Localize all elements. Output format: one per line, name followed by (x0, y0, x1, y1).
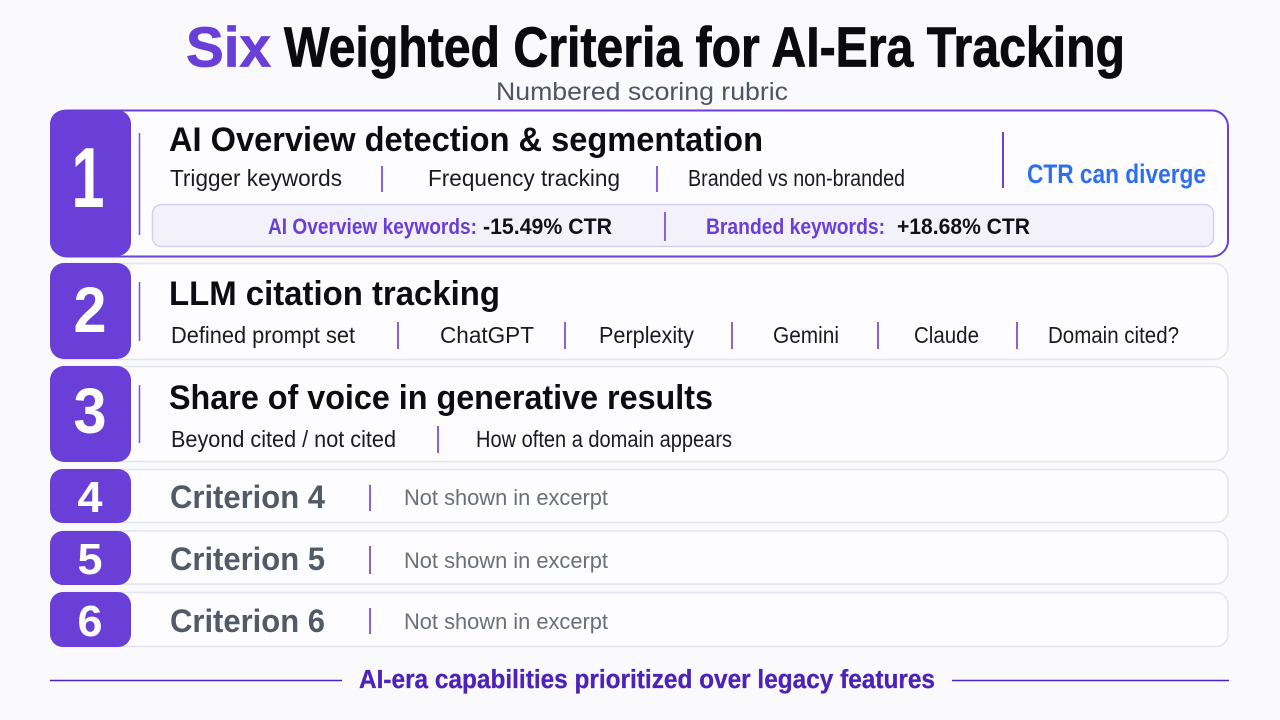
title: Weighted Criteria for AI-Era Tracking (284, 16, 1125, 80)
stat strip: +18.68% CTR (897, 214, 1030, 239)
panel: criterion 5 (50, 531, 1228, 585)
note 4: Not shown in excerpt (404, 485, 608, 510)
label 4: Criterion 4 (170, 479, 325, 515)
badge 3: 3 (74, 375, 106, 447)
sub-items 1 (170, 165, 905, 192)
note 5: Not shown in excerpt (404, 548, 608, 573)
badge 1: 1 (72, 131, 104, 226)
sub-items 2: Perplexity (599, 322, 694, 348)
badge 2 (50, 263, 131, 359)
divider accent (138, 133, 140, 235)
label 5: Criterion 5 (170, 541, 325, 577)
badge 6 (50, 592, 131, 647)
panel: criterion 1 (50, 110, 1228, 256)
sub-items 2: Domain cited? (1048, 322, 1179, 348)
sub-items 1: Frequency tracking (428, 165, 620, 191)
badge 4 (50, 469, 131, 523)
heading 3: Share of voice in generative results (169, 379, 713, 417)
stat strip: Branded keywords: (706, 214, 885, 239)
heading 1: AI Overview detection & segmentation (169, 121, 763, 159)
sub-items 1: Trigger keywords (170, 165, 342, 191)
footer takeaway: AI-era capabilities prioritized over legacy features (359, 666, 935, 694)
sub-items 1: Branded vs non-branded (688, 165, 905, 191)
sub-items 2: Gemini (773, 322, 839, 348)
badge 5 (50, 531, 131, 585)
badge 2: 2 (74, 274, 106, 346)
heading 2: LLM citation tracking (169, 275, 500, 313)
badge 3 (50, 366, 131, 462)
stat strip: AI Overview keywords: (268, 214, 477, 239)
label 6: Criterion 6 (170, 603, 325, 639)
sub-items 3: Beyond cited / not cited (171, 426, 396, 452)
sub-items 2: ChatGPT (440, 322, 534, 348)
callout divider (1002, 132, 1004, 188)
sub-items 3: How often a domain appears (476, 426, 732, 452)
sub-items 2 (171, 322, 1179, 349)
badge 5: 5 (78, 535, 102, 584)
panel: criterion 3 (50, 366, 1228, 462)
title: Six (186, 16, 271, 80)
stat strip (152, 204, 1214, 246)
panel: criterion 2 (50, 263, 1228, 360)
sub-items 2: Defined prompt set (171, 322, 356, 348)
badge 1 (50, 110, 131, 256)
divider accent (138, 282, 140, 341)
panel: criterion 6 (50, 592, 1228, 647)
divider accent (138, 385, 140, 443)
badge 4: 4 (78, 473, 103, 522)
callout: CTR can diverge: CTR can diverge (1027, 159, 1206, 189)
badge 6: 6 (78, 597, 102, 646)
note 6: Not shown in excerpt (404, 609, 608, 634)
sub-items 3 (171, 426, 732, 453)
sub-items 2: Claude (914, 322, 979, 348)
stat strip: -15.49% CTR (483, 214, 612, 239)
panel: criterion 4 (50, 469, 1228, 523)
subtitle: Numbered scoring rubric (496, 78, 788, 106)
